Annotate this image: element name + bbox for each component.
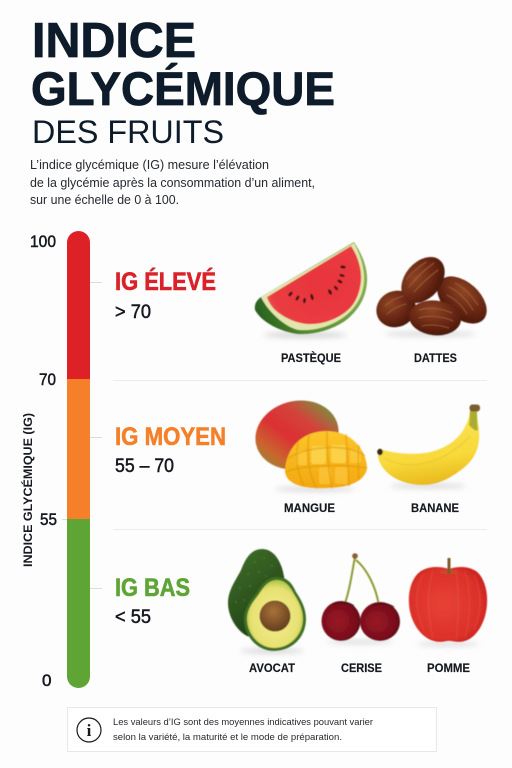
icon: info xyxy=(77,718,101,742)
category: low GI xyxy=(115,574,190,628)
axis label: INDICE GLYCÉMIQUE (IG) xyxy=(20,413,35,567)
scale values: 70 xyxy=(39,370,56,389)
fruit: avocado xyxy=(228,549,306,654)
scale bar xyxy=(62,231,102,688)
intro text: de la glycémie après la consommation d’un aliment, xyxy=(30,175,315,190)
category: medium GI: 55 – 70 xyxy=(115,456,174,477)
scale values: 55 xyxy=(40,510,57,529)
intro text xyxy=(30,157,315,207)
intro text: L’indice glycémique (IG) mesure l’élévation xyxy=(30,157,269,172)
category: high GI: > 70 xyxy=(115,302,151,323)
label: pasteque: PASTÈQUE xyxy=(281,352,341,365)
title xyxy=(31,14,335,150)
note text: Les valeurs d’IG sont des moyennes indicatives pouvant varier xyxy=(113,717,373,728)
title: GLYCÉMIQUE xyxy=(31,62,335,115)
category: high GI xyxy=(115,267,216,323)
fruit: banana xyxy=(377,404,480,488)
title: DES FRUITS xyxy=(32,114,224,150)
category: medium GI xyxy=(115,423,226,477)
fruit: cherries xyxy=(322,553,400,644)
fruit: dates xyxy=(370,249,496,338)
intro text: sur une échelle de 0 à 100. xyxy=(30,192,179,207)
scale values: 100 xyxy=(30,232,56,251)
fruit: mango xyxy=(248,392,367,492)
label: pomme: POMME xyxy=(427,663,470,675)
label: banane: BANANE xyxy=(411,503,459,515)
dividers xyxy=(113,380,487,530)
category: high GI: IG ÉLEVÉ xyxy=(115,267,216,296)
title: INDICE xyxy=(32,14,196,68)
scale values xyxy=(30,232,57,690)
label: mangue: MANGUE xyxy=(284,503,335,515)
category: low GI: IG BAS xyxy=(115,574,190,602)
scale values: 0 xyxy=(42,671,52,690)
note box xyxy=(68,708,436,752)
category: low GI: < 55 xyxy=(115,607,151,628)
icon: info: i xyxy=(87,721,92,740)
category: medium GI: IG MOYEN xyxy=(115,423,226,451)
note text xyxy=(113,717,373,743)
label: avocat: AVOCAT xyxy=(249,663,295,675)
fruit: watermelon xyxy=(255,242,367,338)
fruit: apple xyxy=(409,558,487,646)
label: cerise: CERISE xyxy=(341,663,382,675)
note text: selon la variété, la maturité et le mode de préparation. xyxy=(113,732,342,743)
label: dattes: DATTES xyxy=(414,353,457,365)
